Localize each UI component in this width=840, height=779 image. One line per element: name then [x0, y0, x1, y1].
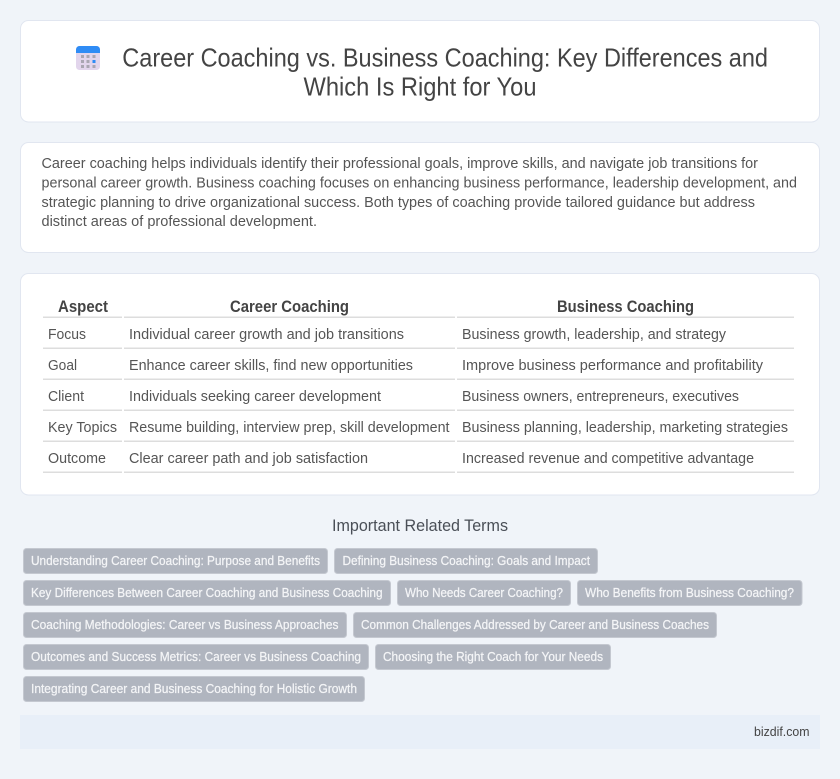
panel: comparison table: [20, 274, 820, 495]
table row: outcome: Outcome: [48, 450, 106, 467]
title: Career Coaching vs. Business Coaching: Key Differences and: [122, 42, 768, 72]
icon: calendar: [76, 46, 100, 70]
tag: [24, 580, 390, 606]
tag: [24, 612, 346, 638]
tag: [398, 580, 570, 606]
tag: Understanding Career Coaching: Purpose and Benefits: [31, 553, 320, 568]
table row: focus: Individual career growth and job transitions: [129, 326, 404, 343]
text block: introduction paragraph: [42, 155, 797, 230]
tag: Common Challenges Addressed by Career and Business Coaches: [361, 617, 709, 632]
text block: introduction paragraph: Career coaching helps individuals identify their professional goals, improve skills, and navigate job transitions for: [42, 155, 758, 172]
footer bar: bizdif.com: [754, 725, 810, 739]
table row: outcome: [43, 450, 794, 472]
table row: key topics: Key Topics: [48, 419, 117, 436]
table row: focus: [43, 326, 794, 348]
tag: Choosing the Right Coach for Your Needs: [383, 649, 603, 664]
table row: goal: Goal: [48, 357, 77, 374]
table row: goal: Enhance career skills, find new opportunities: [129, 357, 413, 374]
title: [122, 42, 768, 102]
text block: introduction paragraph: personal career growth. Business coaching focuses on enhancing business performance, leadership development, and: [42, 174, 797, 192]
tag group: related terms: [24, 548, 802, 702]
table row: focus: Business growth, leadership, and strategy: [462, 326, 726, 343]
panel: title header: [20, 20, 820, 122]
tag: [24, 548, 328, 574]
tag: [578, 580, 802, 606]
table row: outcome: Increased revenue and competitive advantage: [462, 450, 754, 467]
tag: Defining Business Coaching: Goals and Impact: [342, 553, 590, 568]
tag: Key Differences Between Career Coaching and Business Coaching: [31, 585, 382, 600]
tag: [334, 548, 598, 574]
table row: key topics: Resume building, interview prep, skill development: [129, 419, 450, 436]
panel: introduction: [20, 142, 820, 252]
tag: Coaching Methodologies: Career vs Business Approaches: [31, 617, 338, 632]
table row: focus: Focus: [48, 326, 86, 343]
title: Which Is Right for You: [304, 72, 536, 102]
table row: client: Business owners, entrepreneurs, executives: [462, 388, 739, 405]
tag: [24, 644, 368, 670]
table row: client: Client: [48, 388, 85, 405]
table header row: Business Coaching: [557, 298, 694, 316]
text block: introduction paragraph: strategic planning to drive organizational success. Both types of coaching provide tailored guidance but address: [42, 194, 755, 211]
table row: outcome: Clear career path and job satisfaction: [129, 450, 368, 467]
tag: Who Benefits from Business Coaching?: [585, 585, 794, 600]
tag: Who Needs Career Coaching?: [405, 585, 563, 600]
text block: introduction paragraph: distinct areas of professional development.: [42, 213, 317, 230]
table row: client: [43, 388, 794, 410]
table row: client: Individuals seeking career development: [129, 388, 382, 405]
tag: Integrating Career and Business Coaching for Holistic Growth: [31, 681, 357, 696]
table header row: Career Coaching: [230, 298, 349, 316]
footer bar: [20, 715, 820, 749]
tag: [24, 676, 364, 702]
table row: goal: [43, 357, 794, 379]
table header row: Aspect: [58, 298, 108, 316]
tag: [376, 644, 610, 670]
table header row: [43, 298, 794, 317]
table row: goal: Improve business performance and profitability: [462, 357, 763, 374]
table row: key topics: [43, 419, 794, 441]
heading: important related terms: Important Related Terms: [332, 517, 508, 535]
tag: [354, 612, 716, 638]
tag: Outcomes and Success Metrics: Career vs Business Coaching: [31, 649, 361, 664]
table row: key topics: Business planning, leadership, marketing strategies: [462, 419, 788, 436]
